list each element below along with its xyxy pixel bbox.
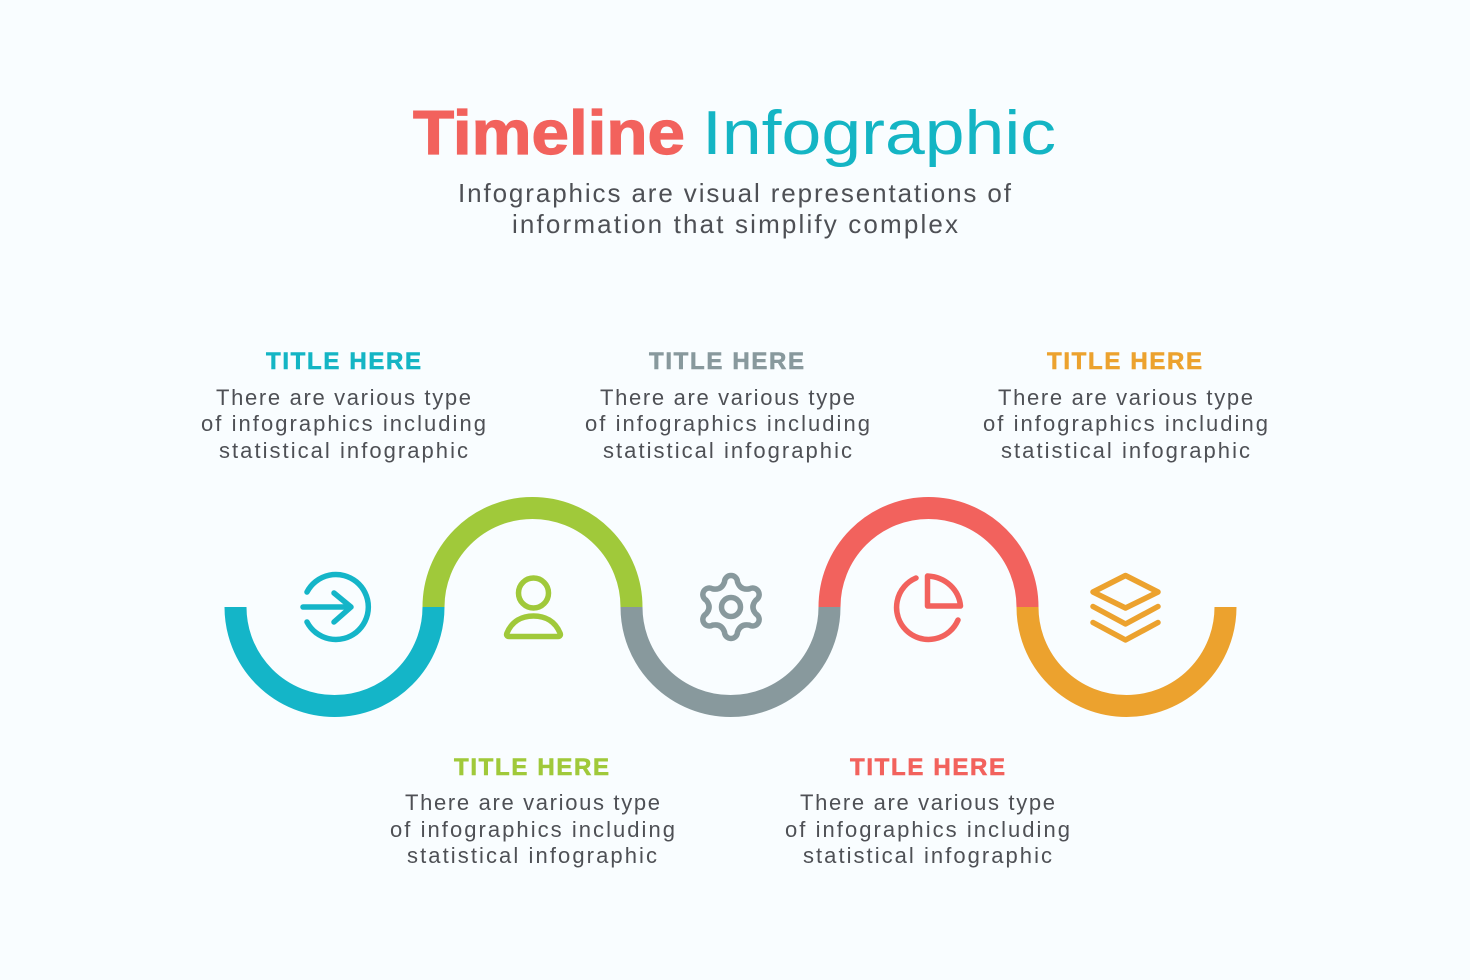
subtitle: information that simplify complex: [512, 209, 958, 239]
subtitle: Infographics are visual representations of: [458, 178, 1012, 208]
text block: step 4: of infographics including: [785, 817, 1070, 842]
text block: step 3: of infographics including: [585, 411, 870, 436]
text block: step 4: There are various type: [800, 790, 1055, 815]
text block: step 5: of infographics including: [983, 411, 1268, 436]
title: [413, 99, 1056, 168]
arc: teal: [236, 607, 434, 706]
arc: red: [830, 508, 1028, 607]
text block: step 2: statistical infographic: [407, 843, 657, 868]
arc: grey: [632, 607, 830, 706]
text block: step 5: TITLE HERE: [1047, 348, 1202, 375]
text block: step 4: [785, 754, 1070, 868]
text block: step 2: TITLE HERE: [454, 754, 609, 781]
icon: arrow in circle: [303, 574, 368, 640]
text block: step 5: There are various type: [998, 385, 1253, 410]
text block: step 5: statistical infographic: [1001, 438, 1250, 463]
icon: layers: [1093, 576, 1158, 640]
text block: step 4: TITLE HERE: [850, 754, 1005, 781]
text block: step 4: statistical infographic: [803, 843, 1052, 868]
text block: step 2: [390, 754, 675, 868]
text block: step 3: TITLE HERE: [649, 348, 804, 375]
subtitle: [458, 178, 1012, 239]
icon: person: [507, 578, 560, 636]
icon: pie chart: [897, 576, 960, 639]
text block: step 3: statistical infographic: [603, 438, 852, 463]
text block: step 5: [983, 348, 1268, 463]
text block: step 3: There are various type: [600, 385, 855, 410]
arc: green: [434, 508, 632, 607]
icon: gear: [703, 576, 759, 638]
arc: orange: [1028, 607, 1226, 706]
text block: step 2: of infographics including: [390, 817, 675, 842]
text block: step 3: [585, 348, 870, 463]
title: Timeline: [413, 99, 685, 168]
text block: step 2: There are various type: [405, 790, 660, 815]
text block: step 1: statistical infographic: [219, 438, 468, 463]
wave timeline: [236, 508, 1226, 706]
text block: step 1: of infographics including: [201, 411, 486, 436]
title: Infographic: [702, 99, 1056, 168]
text block: step 1: There are various type: [216, 385, 471, 410]
text block: step 1: [201, 348, 486, 463]
text block: step 1: TITLE HERE: [266, 348, 421, 375]
